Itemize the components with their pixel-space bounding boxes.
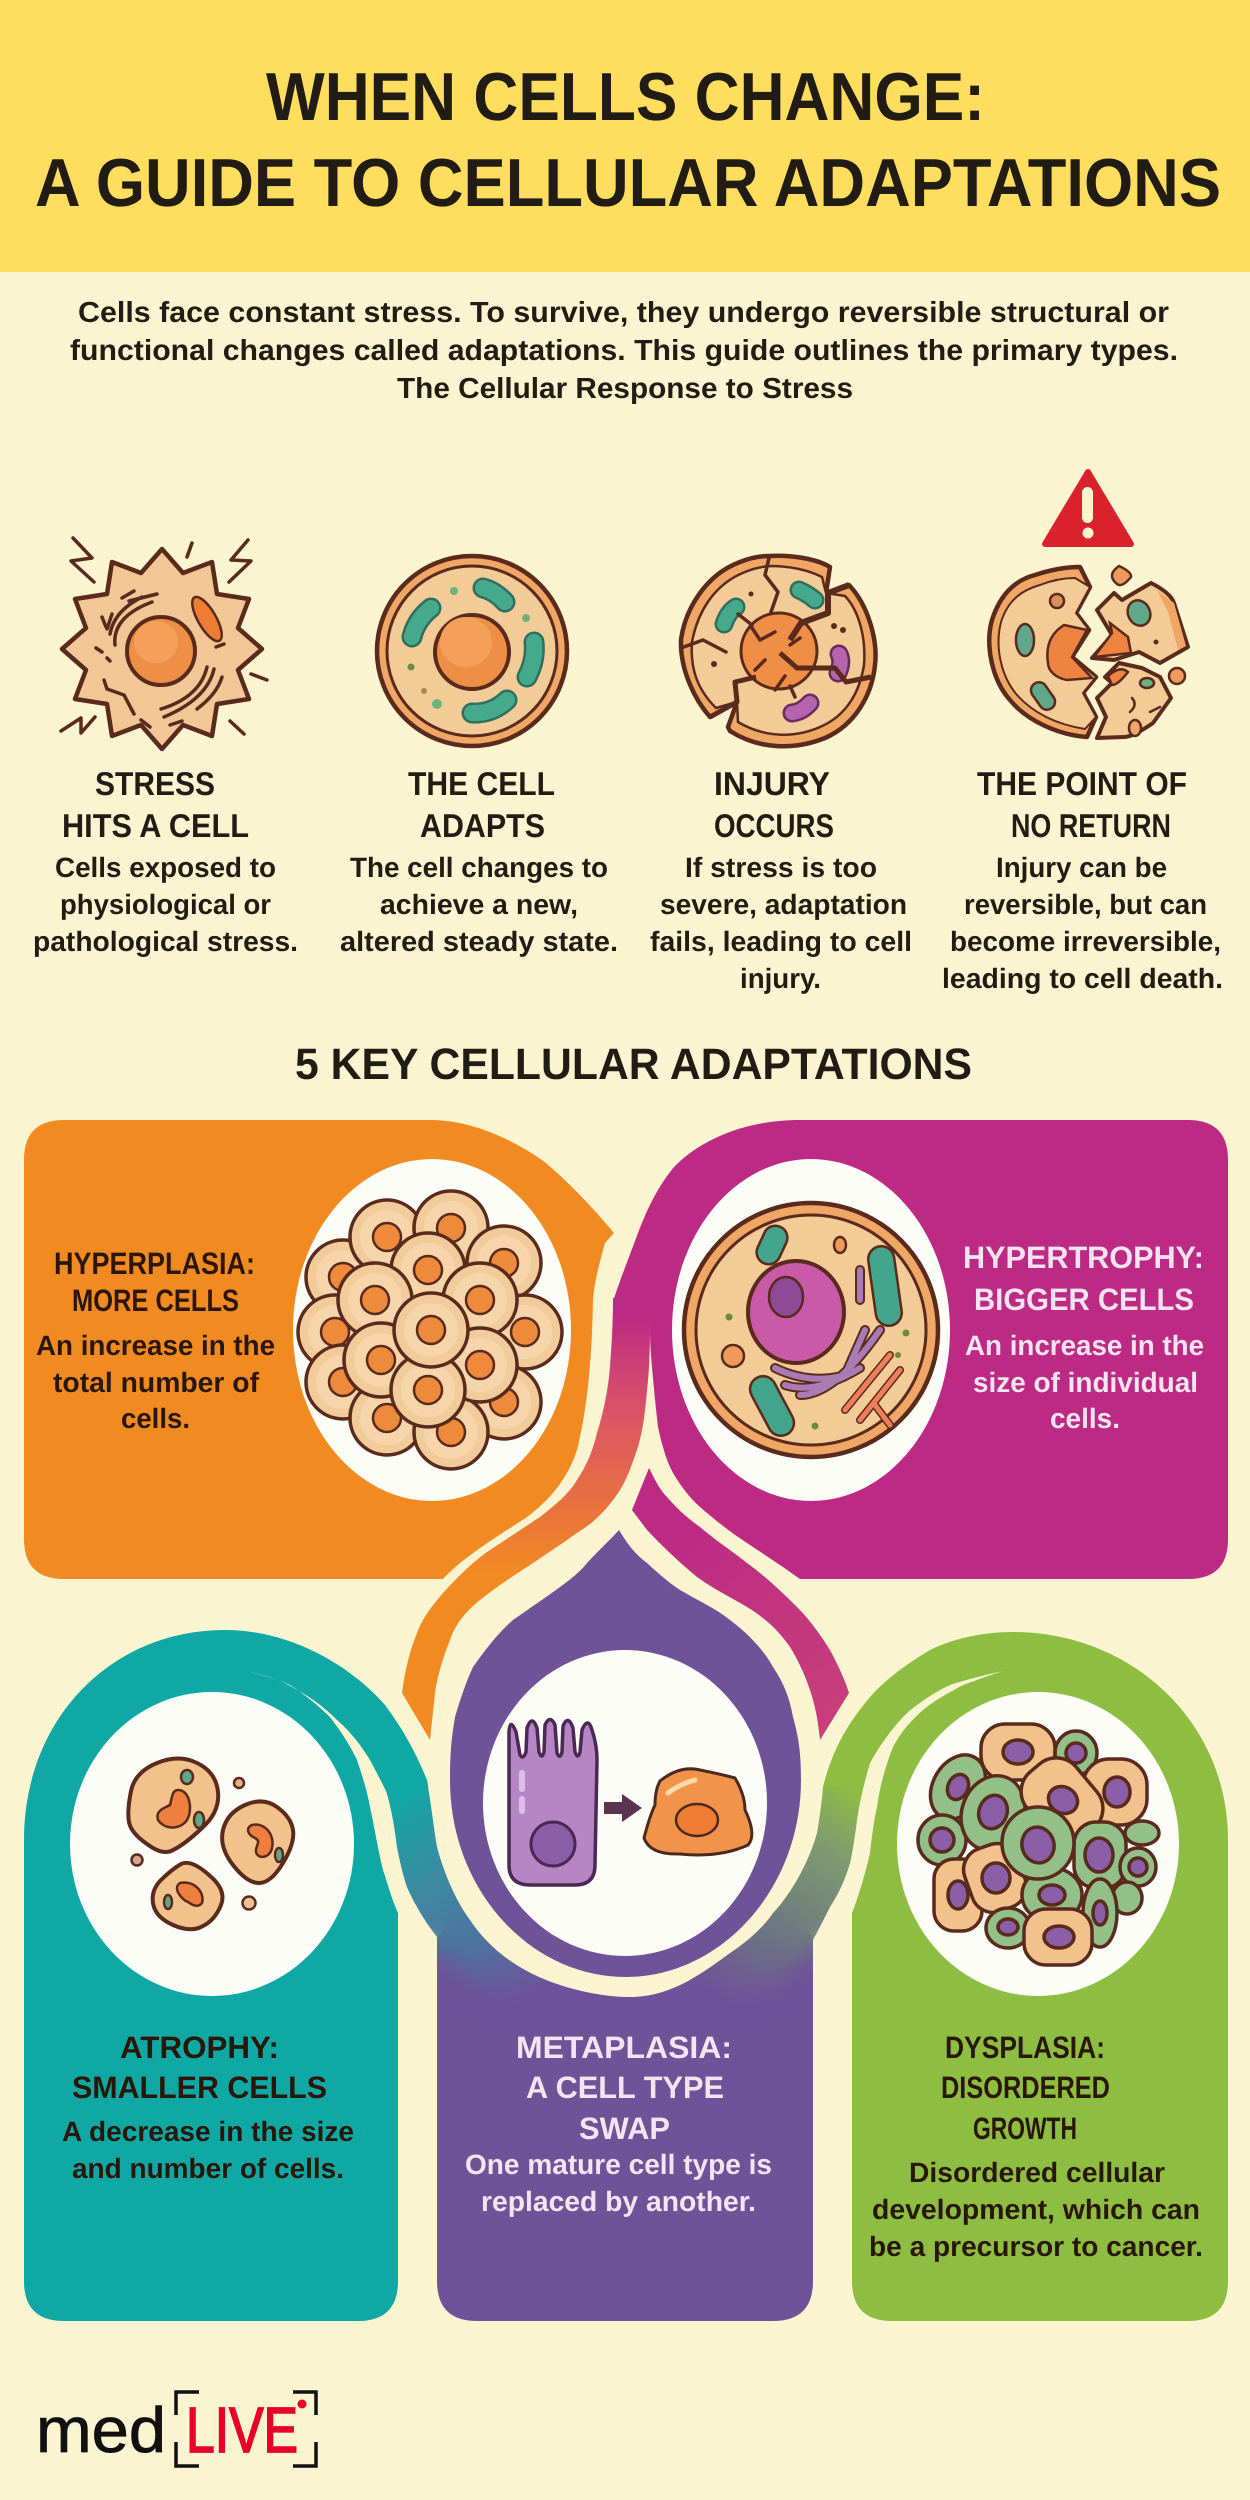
white oval with disordered cells (897, 1692, 1179, 1996)
step 3 text: severe, adaptation (660, 889, 907, 920)
icon: stressed cell (61, 538, 267, 749)
step 1 text: HITS A CELL (62, 807, 249, 844)
step 1 text: STRESS (95, 765, 215, 802)
panel: dysplasia (813, 1632, 1228, 2321)
step 4 text: leading to cell death. (942, 963, 1223, 994)
white oval with large cell (672, 1159, 950, 1501)
dysplasia text: development, which can (872, 2194, 1200, 2225)
logo: medLIVE (36, 2392, 316, 2466)
atrophy text: A decrease in the size (62, 2116, 354, 2147)
intro text: The Cellular Response to Stress (397, 373, 853, 405)
hyperplasia text: total number of (53, 1367, 260, 1398)
step 3 text: injury. (740, 963, 821, 994)
hyperplasia text (36, 1246, 275, 1434)
section heading: 5 KEY CELLULAR ADAPTATIONS (295, 1040, 972, 1089)
step 1 text: pathological stress. (33, 926, 298, 957)
hypertrophy text (963, 1240, 1204, 1434)
hyperplasia text: HYPERPLASIA: (54, 1246, 255, 1281)
title banner (0, 0, 1250, 272)
metaplasia text: SWAP (579, 2111, 670, 2146)
icon: injured cell with cracks (681, 556, 876, 746)
panel: hypertrophy (613, 1120, 1228, 1579)
ribbon: magenta to orange swoosh (402, 1298, 650, 1740)
icon: adapted cell (377, 556, 567, 746)
atrophy text (62, 2030, 354, 2184)
step 3 text: OCCURS (714, 807, 834, 844)
step 4 text (942, 765, 1223, 994)
metaplasia text (465, 2030, 772, 2217)
step 2 text: achieve a new, (380, 889, 578, 920)
intro text (70, 297, 1178, 405)
white oval with cell cluster (293, 1159, 571, 1501)
dysplasia text: GROWTH (973, 2111, 1077, 2146)
white oval with shrunken cells (70, 1692, 354, 1996)
logo: medLIVE: med (36, 2394, 166, 2466)
step 4 text: become irreversible, (950, 926, 1221, 957)
step 1 text (33, 765, 298, 957)
step 3 text (650, 765, 912, 994)
hypertrophy text: HYPERTROPHY: (963, 1240, 1204, 1275)
hypertrophy text: size of individual (973, 1367, 1198, 1398)
dysplasia text: DISORDERED (941, 2070, 1110, 2105)
step 3 text: If stress is too (685, 852, 877, 883)
step 2 text: THE CELL (408, 765, 555, 802)
step 1 text: physiological or (60, 889, 271, 920)
dysplasia text: DYSPLASIA: (945, 2030, 1105, 2065)
hypertrophy text: An increase in the (965, 1330, 1204, 1361)
dysplasia text: Disordered cellular (909, 2157, 1165, 2188)
title banner: WHEN CELLS CHANGE: (266, 59, 985, 135)
step 1 text: Cells exposed to (55, 852, 276, 883)
atrophy text: SMALLER CELLS (72, 2070, 327, 2105)
purple drop with oval (450, 1530, 801, 1977)
metaplasia text: METAPLASIA: (516, 2030, 732, 2065)
atrophy text: ATROPHY: (120, 2030, 279, 2065)
icon: fragmented cell (989, 566, 1188, 738)
hyperplasia text: MORE CELLS (72, 1283, 239, 1318)
metaplasia text: One mature cell type is (465, 2149, 772, 2180)
step 2 text (340, 765, 618, 957)
hypertrophy text: BIGGER CELLS (974, 1282, 1194, 1317)
ribbon: magenta swoosh (632, 1468, 849, 1740)
hyperplasia text: An increase in the (36, 1330, 275, 1361)
step 2 text: altered steady state. (340, 926, 618, 957)
step 4 text: THE POINT OF (977, 765, 1187, 802)
step 4 text: reversible, but can (964, 889, 1207, 920)
white oval with cell type swap (483, 1650, 767, 1956)
panel: hyperplasia (24, 1120, 614, 1579)
metaplasia text: A CELL TYPE (526, 2070, 724, 2105)
logo: medLIVE: LIVE (186, 2394, 298, 2466)
dysplasia text (869, 2030, 1203, 2262)
icon: warning triangle (1045, 472, 1131, 544)
cream crescent (428, 1787, 823, 1997)
arrow (604, 1794, 642, 1822)
ribbon: green to purple swoosh (712, 1787, 860, 1985)
step 4 text: Injury can be (996, 852, 1167, 883)
hyperplasia text: cells. (121, 1403, 190, 1434)
metaplasia text: replaced by another. (481, 2186, 756, 2217)
hypertrophy text: cells. (1050, 1403, 1120, 1434)
step 3 text: INJURY (714, 765, 830, 802)
step 4 text: NO RETURN (1011, 807, 1171, 844)
panel: atrophy (24, 1630, 437, 2321)
step 3 text: fails, leading to cell (650, 926, 912, 957)
step 2 text: ADAPTS (420, 807, 545, 844)
intro text: Cells face constant stress. To survive, they undergo reversible structural or (78, 297, 1169, 329)
panel: metaplasia (385, 1530, 863, 2321)
step 2 text: The cell changes to (350, 852, 608, 883)
atrophy text: and number of cells. (72, 2153, 344, 2184)
ribbon: teal to purple swoosh (386, 1791, 530, 1988)
dysplasia text: be a precursor to cancer. (869, 2231, 1203, 2262)
intro text: functional changes called adaptations. This guide outlines the primary types. (70, 335, 1178, 367)
